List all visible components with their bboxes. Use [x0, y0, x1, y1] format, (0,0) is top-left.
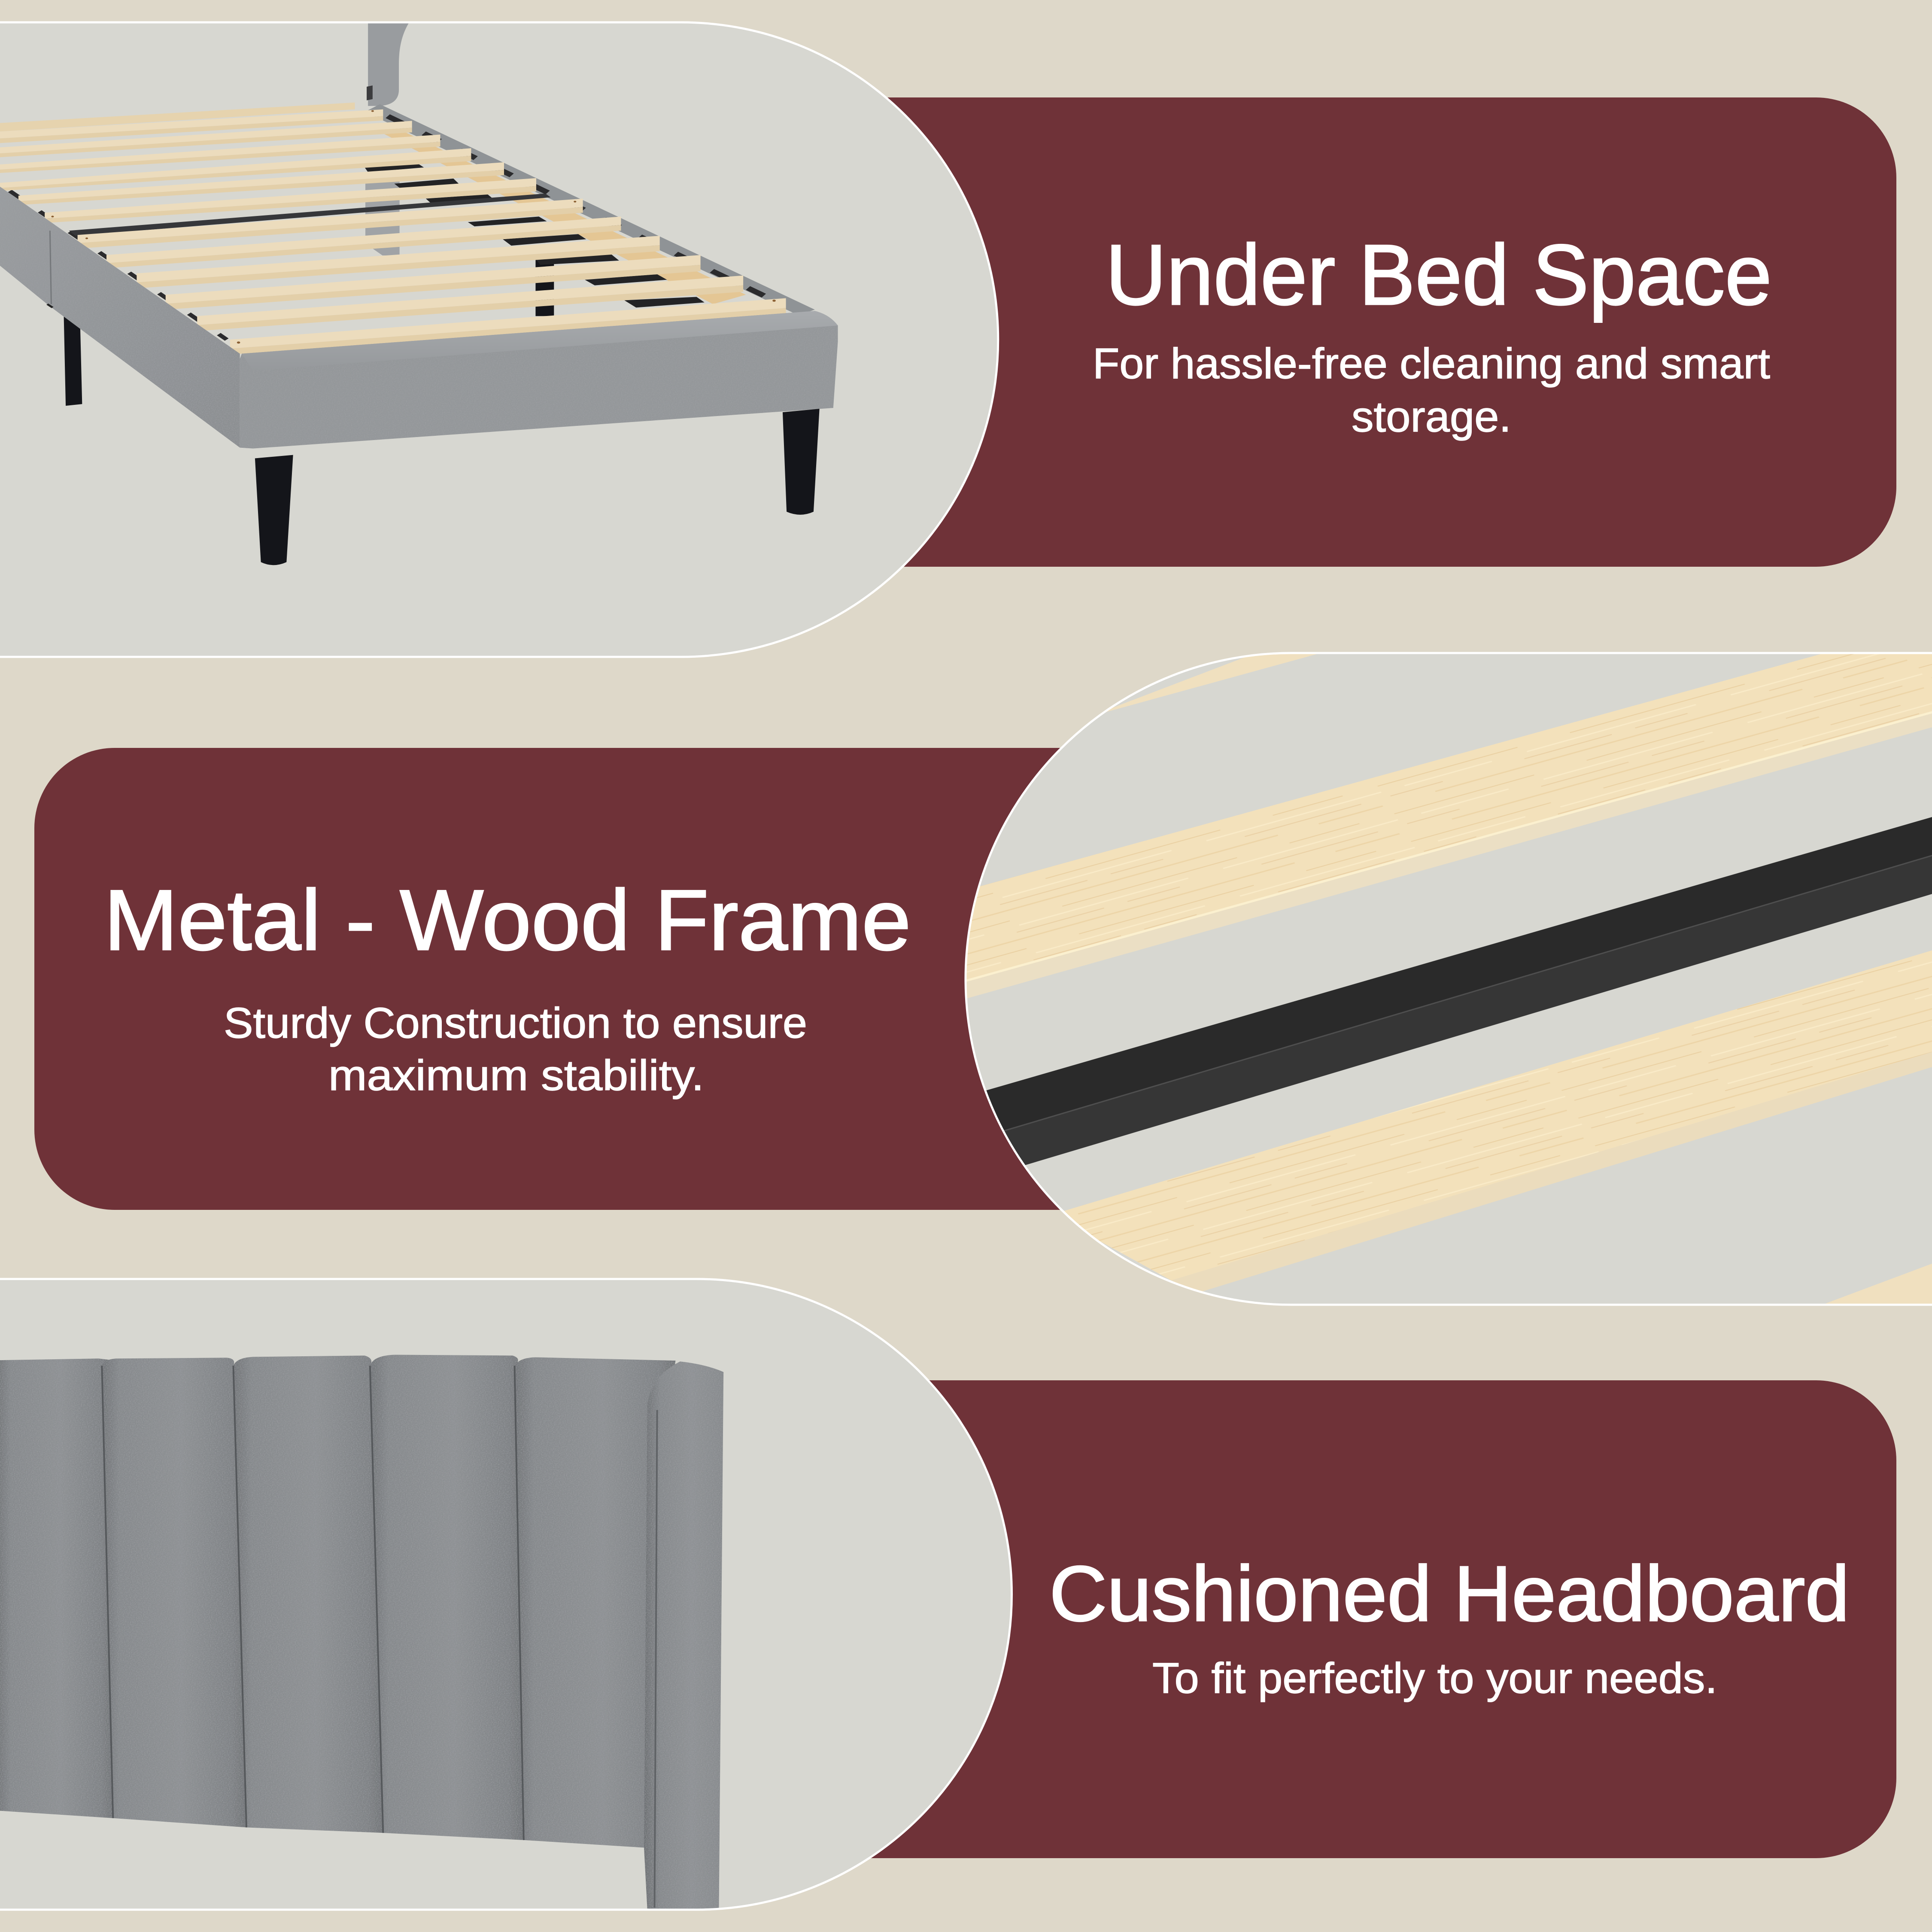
heading: metal wood frame: Metal - Wood Frame	[104, 872, 911, 968]
rear post under frame	[365, 182, 400, 255]
panel: under bed space	[730, 97, 1896, 567]
photo panel: slats and metal bar	[963, 652, 1932, 1310]
channel 3	[233, 1355, 383, 1833]
heading: under bed space: Under Bed Space	[1106, 227, 1772, 323]
panel: metal wood frame	[34, 748, 1194, 1210]
sliver slat top	[1089, 652, 1325, 717]
far legs	[64, 256, 554, 406]
front rail	[240, 311, 838, 449]
text: metal wood frame description: Sturdy Construction to ensure	[224, 999, 807, 1047]
side rail	[0, 187, 240, 448]
centre metal bar	[69, 194, 551, 236]
headboard post	[368, 23, 409, 106]
channel 2	[102, 1358, 246, 1827]
photo panel: headboard	[0, 1279, 1012, 1910]
channel 4	[370, 1355, 524, 1840]
side rail inner strip	[365, 104, 815, 315]
centre wooden beam	[365, 124, 746, 304]
text: under bed space description	[1093, 340, 1770, 441]
text: under bed space description: For hassle-free cleaning and smart	[1093, 340, 1770, 388]
wooden slats	[0, 103, 786, 355]
card: metal wood frame	[34, 748, 1194, 1210]
channel seams	[102, 1366, 657, 1908]
channel 5	[514, 1357, 675, 1848]
wing	[644, 1361, 723, 1909]
black slat holders	[365, 163, 705, 307]
text: cushioned headboard description: To fit perfectly to your needs.	[1152, 1654, 1717, 1702]
text: metal wood frame description	[224, 999, 807, 1100]
photo panel: bed frame	[0, 22, 998, 657]
upper wood slat	[963, 652, 1932, 981]
card: cushioned headboard	[730, 1380, 1896, 1858]
text: under bed space description: storage.	[1352, 393, 1511, 441]
channel 1	[0, 1358, 113, 1818]
illustration: upholstered headboard	[0, 1355, 723, 1909]
front legs	[255, 409, 820, 565]
sliver slat bottom	[1807, 1261, 1932, 1310]
illustration: slats and bar	[963, 652, 1932, 1310]
panel: cushioned headboard	[730, 1380, 1896, 1858]
text: metal wood frame description: maximum stability.	[328, 1051, 704, 1100]
illustration: bed frame	[0, 23, 838, 565]
black metal bar	[976, 815, 1932, 1133]
card: under bed space	[730, 97, 1896, 567]
heading: cushioned headboard: Cushioned Headboard	[1049, 1549, 1850, 1637]
lower wood slat	[1051, 948, 1932, 1280]
